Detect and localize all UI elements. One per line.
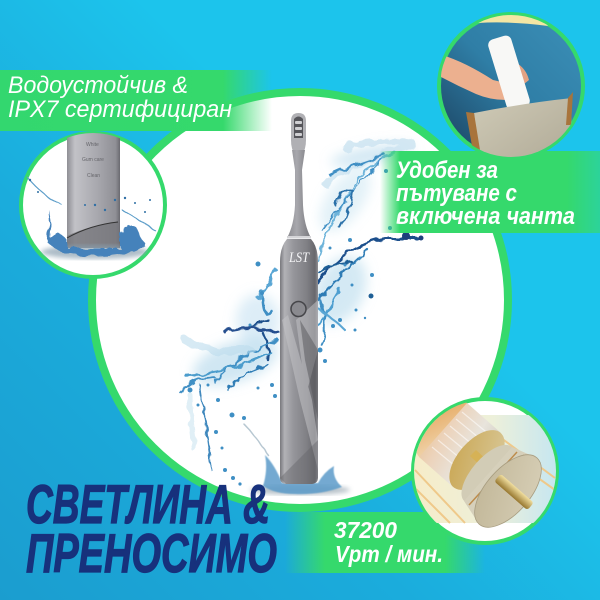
white cylinder: [488, 36, 530, 107]
main white circle with green ring: [92, 92, 508, 508]
band text: waterproof: Водоустойчив &: [8, 72, 188, 99]
title: ПРЕНОСИМО: [26, 522, 277, 584]
title: [26, 473, 277, 584]
photo circle: waterproof: [21, 130, 165, 277]
power button: [291, 302, 306, 316]
output pin: [495, 475, 533, 509]
splash: [28, 178, 155, 259]
photo circle: motor: [407, 392, 560, 543]
water droplets: [188, 169, 424, 486]
green band top left: [0, 70, 272, 131]
green band right: [380, 151, 600, 233]
water splash around toothbrush: [180, 142, 422, 470]
bag: [474, 98, 572, 157]
toothbrush neck: [287, 150, 311, 238]
band text: waterproof: IPX7 сертифициран: [8, 96, 232, 123]
toothbrush handle: [280, 239, 318, 484]
band text: waterproof: [8, 72, 232, 123]
logo: LST: [288, 250, 310, 266]
toothbrush: [280, 113, 318, 484]
gold face: [449, 430, 505, 490]
photo circle: waterproof: Gum care: [82, 157, 104, 163]
photo circle: waterproof: White: [86, 142, 99, 148]
small pin: [470, 450, 483, 462]
band text: speed: [334, 517, 443, 567]
band text: travel: [396, 157, 575, 230]
title: СВЕТЛИНА &: [26, 473, 270, 535]
soft water haze: [187, 140, 415, 395]
disc body: [462, 444, 528, 518]
band text: speed: 37200: [334, 517, 397, 543]
toothbrush head: [291, 113, 306, 155]
yellow wall strip: [478, 15, 548, 26]
band text: travel: Удобен за: [396, 157, 498, 184]
band text: travel: включена чанта: [396, 203, 575, 230]
ribbed cylinder: [416, 402, 467, 457]
silver ring: [287, 236, 311, 238]
band text: travel: пътуване с: [396, 180, 517, 207]
photo circle: travel bag: [439, 14, 583, 170]
silver disc face: [474, 454, 542, 528]
water pool at brush base: [250, 455, 350, 495]
photo circle: waterproof: Clean: [87, 173, 100, 179]
handle facets: [282, 300, 318, 470]
green band bottom: [285, 512, 485, 573]
arm: [441, 55, 506, 100]
band text: speed: Vpm / мин.: [335, 541, 443, 567]
bristles: [294, 116, 303, 138]
